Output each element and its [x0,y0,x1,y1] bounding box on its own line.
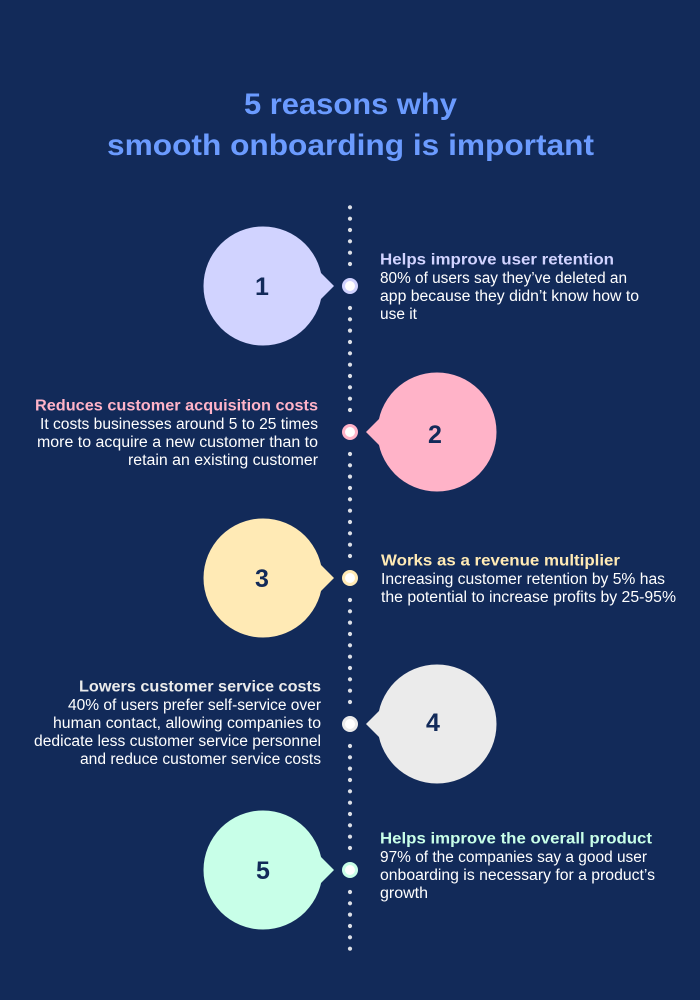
text: reason 4: human contact, allowing companies to [53,715,321,732]
number 4: 4 [426,709,440,737]
marker 5 [342,862,358,878]
title: 5 reasons why [244,88,457,121]
text: reason 1 [380,252,639,323]
panel: reason 3 [204,518,676,638]
text: reason 4: dedicate less customer service personnel [34,733,321,750]
text: reason 2 [35,398,318,469]
dotted timeline [348,205,352,951]
panel: reason 4 [34,664,496,784]
text: reason 2: retain an existing customer [128,452,318,469]
panel: reason 5 [204,810,655,930]
marker 2 [342,424,358,440]
title: smooth onboarding is important [107,129,594,162]
text: reason 5: Helps improve the overall product [380,830,653,848]
text: reason 3 [381,552,676,606]
text: reason 4: Lowers customer service costs [79,678,321,696]
number 5: 5 [256,857,270,885]
marker 4 [342,716,358,732]
text: reason 4: and reduce customer service costs [80,751,321,768]
number 2: 2 [428,421,442,449]
icon: speech bubble 1 [204,226,334,346]
icon: speech bubble 2 [366,372,496,492]
title [107,88,594,162]
text: reason 4 [34,678,321,768]
text: reason 3: Increasing customer retention by 5% has [381,571,665,588]
text: reason 1: use it [380,306,418,323]
text: reason 1: 80% of users say they’ve deleted an [380,270,627,287]
text: reason 5: onboarding is necessary for a product’s [380,867,655,884]
number 3: 3 [255,565,269,593]
text: reason 3: Works as a revenue multiplier [381,552,620,570]
marker 3 [342,570,358,586]
marker 1 [342,278,358,294]
icon: speech bubble 3 [204,518,334,638]
text: reason 2: It costs businesses around 5 to 25 times [40,416,318,433]
panel: reason 1 [204,226,639,346]
text: reason 5: 97% of the companies say a good user [380,849,647,866]
text: reason 1: app because they didn’t know how to [380,288,639,305]
panel: reason 2 [35,372,496,492]
number 1: 1 [255,273,269,301]
text: reason 5 [380,830,655,902]
text: reason 2: Reduces customer acquisition costs [35,398,318,414]
icon: speech bubble 4 [366,664,496,784]
icon: speech bubble 5 [204,810,334,930]
text: reason 1: Helps improve user retention [380,252,614,268]
text: reason 2: more to acquire a new customer than to [37,434,318,451]
text: reason 5: growth [380,885,428,902]
text: reason 3: the potential to increase profits by 25-95% [381,589,676,606]
text: reason 4: 40% of users prefer self-service over [68,697,321,714]
